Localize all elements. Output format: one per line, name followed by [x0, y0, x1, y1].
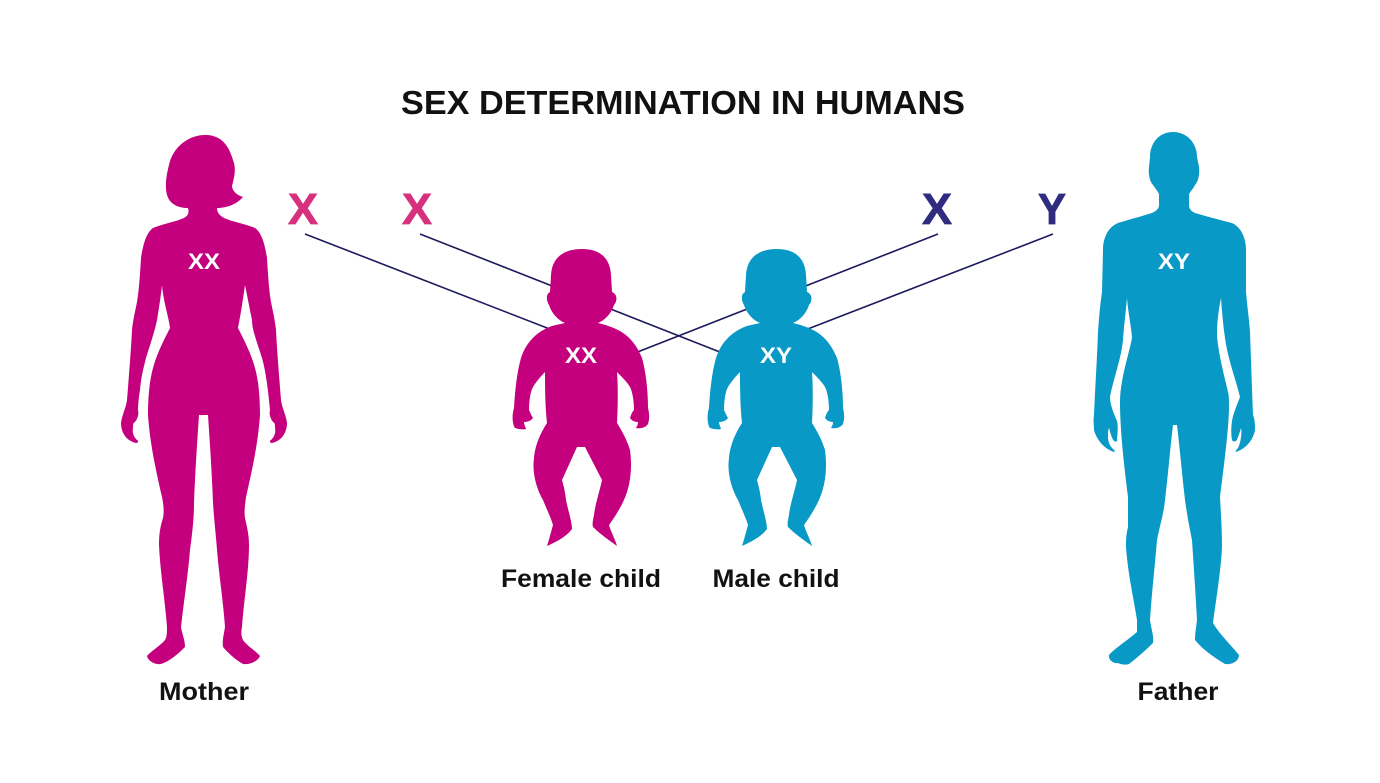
connecting lines from parent chromosomes to children	[305, 234, 1053, 356]
label: Female child: Female child	[501, 565, 661, 593]
figure: female child silhouette	[513, 249, 649, 546]
figure: mother silhouette	[121, 135, 287, 664]
chromosome letter: father X: X	[922, 185, 952, 234]
figure: father silhouette	[1094, 132, 1255, 665]
label: XY on male child: XY	[760, 343, 792, 368]
chromosome letter: mother X right: X	[402, 185, 432, 234]
label: Father: Father	[1138, 678, 1219, 706]
label: Male child: Male child	[712, 565, 840, 593]
chromosome letter: father Y: Y	[1038, 185, 1066, 234]
title: SEX DETERMINATION IN HUMANS	[401, 84, 965, 121]
label: XX on mother: XX	[188, 249, 220, 274]
label: XY on father: XY	[1158, 249, 1190, 274]
label: XX on female child: XX	[565, 343, 597, 368]
figure: male child silhouette	[708, 249, 844, 546]
label: Mother: Mother	[159, 678, 249, 706]
chromosome letter: mother X left: X	[288, 185, 318, 234]
